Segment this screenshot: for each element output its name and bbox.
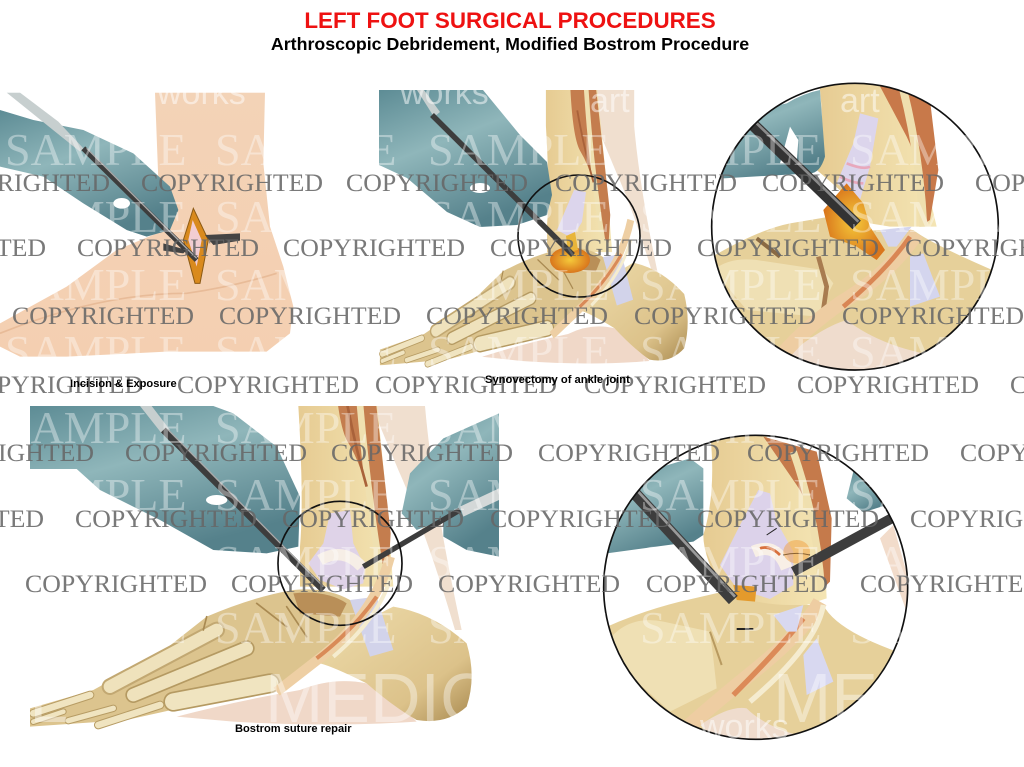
orange tissue (733, 585, 757, 602)
watermark: COPYRIGHTED rows (0, 168, 1024, 598)
watermark: COPYRIGHTED rows: COPYRIGHTED (426, 301, 608, 330)
watermark: SAMPLE rows: SAMPLE (215, 536, 396, 587)
watermark: COPYRIGHTED rows: COPYRIGHTED (25, 569, 207, 598)
left instrument (633, 492, 733, 600)
right instrument (363, 510, 460, 567)
subtitle: Arthroscopic Debridement, Modified Bostrom Procedure (271, 34, 749, 54)
panel: synovectomy of ankle joint (379, 87, 688, 365)
watermark: SAMPLE rows: SAMPLE (215, 469, 396, 520)
watermark: COPYRIGHTED rows: COPYRIGHTED (842, 301, 1024, 330)
caption: Bostrom: Bostrom suture repair (235, 723, 352, 735)
sole tissue (700, 708, 793, 738)
watermark: COPYRIGHTED rows: COPYRIGHTED (125, 438, 307, 467)
title: LEFT FOOT SURGICAL PROCEDURES (304, 8, 716, 33)
foot bones (715, 218, 991, 353)
magnifier circle: panel 2 (518, 175, 640, 297)
watermark: SAMPLE rows: SAMPLE (640, 326, 821, 377)
watermark: SAMPLE rows: SAMPLE (428, 124, 609, 175)
watermark: COPYRIGHTED rows: COPYRIGHTED (331, 438, 513, 467)
watermark: SAMPLE rows: SAMPLE (5, 402, 186, 453)
watermark: artworks: art (590, 82, 630, 120)
muscle (763, 437, 832, 592)
watermark: SAMPLE rows: SAMPLE (215, 402, 396, 453)
watermark: SAMPLE rows: SAMPLE (5, 259, 186, 310)
watermark: COPYRIGHTED rows: COPYRIGHTED (490, 504, 672, 533)
watermark: SAMPLE rows: SAMPLE (640, 602, 821, 653)
watermark: SAMPLE rows: SAMPLE (5, 602, 186, 653)
watermark: COPYRIGHTED rows: COPYRIGHTED (555, 168, 737, 197)
watermark: COPYRIGHTED rows: COPYRIGHTED (646, 569, 828, 598)
ligaments (803, 638, 833, 695)
watermark: COPYRIGHTED rows: COPYRIGHTED (697, 504, 879, 533)
leg anatomy (546, 87, 660, 282)
ligament (557, 190, 586, 238)
tibia (817, 77, 937, 227)
watermark: SAMPLE rows: SAMPLE (5, 326, 186, 377)
foot skeleton (380, 220, 688, 365)
watermark: COPYRIGHTED rows: COPYRIGHTED (634, 301, 816, 330)
instrument (7, 93, 83, 152)
watermark: COPYRIGHTED rows: COPYRIGHTED (219, 301, 401, 330)
left instrument (140, 406, 170, 433)
foot bones (610, 592, 893, 734)
right glove hand (402, 413, 499, 557)
leg anatomy (298, 406, 462, 630)
ligaments (910, 253, 940, 307)
ankle lavender repair (308, 510, 365, 589)
watermark: artworks: works (156, 74, 246, 112)
watermark: SAMPLE rows: SAMPLE (428, 402, 609, 453)
watermark: COPYRIGHTED rows: COPYRIGHTED (12, 301, 194, 330)
watermark: COPYRIGHTED rows: COPYRIGHTED (177, 370, 359, 399)
watermark: SAMPLE rows: SAMPLE (640, 469, 821, 520)
watermark: COPYRIGHTED rows: COPYRIGHTED (75, 504, 257, 533)
watermark: COPYRIGHTED rows: COPYRIGHTED (797, 370, 979, 399)
watermark: COPYRIGHTED rows: COPYRIGHTED (538, 438, 720, 467)
peroneal tendon (783, 233, 917, 353)
watermark: COPYRIGHTED rows: COPYRIGHTED (231, 569, 413, 598)
watermark: SAMPLE rows: SAMPLE (640, 259, 821, 310)
panel: synovectomy close-up circle (707, 77, 1000, 380)
circle outline (712, 83, 998, 370)
instrument (417, 90, 440, 117)
watermark: COPYRIGHTED rows: COPYRIGHTED (375, 370, 557, 399)
inflamed tissue (823, 183, 885, 260)
foot skeleton (30, 557, 472, 727)
caption: synovectomy: Synovectomy of ankle joint (485, 374, 630, 386)
watermark: SAMPLE rows: SAMPLE (5, 469, 186, 520)
watermark: SAMPLE rows: SAMPLE (640, 536, 821, 587)
glove hand (379, 90, 552, 227)
watermark: COPYRIGHTED rows: COPYRIGHTED (584, 370, 766, 399)
skin strip (880, 525, 907, 608)
watermark: MEDICAL: MEDICAL (265, 659, 576, 737)
glove hand (722, 90, 825, 178)
watermark: artworks: works (699, 708, 789, 746)
watermark: SAMPLE rows: SAMPLE (428, 469, 609, 520)
left glove hand (603, 458, 703, 553)
watermark: artworks: works (399, 74, 489, 112)
watermark: COPYRIGHTED rows: COPYRIGHTED (490, 233, 672, 262)
watermark: COPYRIGHTED rows: COPYRIGHTED (77, 233, 259, 262)
panel: Bostrom suture repair (30, 406, 499, 730)
watermark: SAMPLE rows: SAMPLE (215, 259, 396, 310)
inflamed tissue (550, 247, 590, 273)
watermark: COPYRIGHTED rows: COPYRIGHTED (141, 168, 323, 197)
watermark: COPYRIGHTED rows: COPYRIGHTED (282, 504, 464, 533)
incision (183, 208, 208, 283)
watermark: SAMPLE rows: SAMPLE (428, 259, 609, 310)
panel: incision and exposure (0, 93, 293, 357)
watermark: SAMPLE rows: SAMPLE (428, 536, 609, 587)
watermark: COPYRIGHTED rows: COPYRIGHTED (762, 168, 944, 197)
watermark: SAMPLE rows: SAMPLE (428, 602, 609, 653)
caption: incision: Incision & Exposure (70, 378, 177, 390)
left glove hand (30, 406, 300, 553)
watermark: SAMPLE rows: SAMPLE (640, 191, 821, 242)
watermark: COPYRIGHTED rows: COPYRIGHTED (747, 438, 929, 467)
watermark: COPYRIGHTED rows: COPYRIGHTED (283, 233, 465, 262)
tibia (703, 432, 827, 612)
watermark: SAMPLE rows: SAMPLE (428, 326, 609, 377)
retractor (205, 233, 240, 245)
watermark: artworks: art (840, 82, 880, 120)
circle outline (604, 435, 908, 739)
watermark: SAMPLE rows: SAMPLE (215, 602, 396, 653)
watermark: SAMPLE rows: SAMPLE (215, 124, 396, 175)
watermark: SAMPLE rows: SAMPLE (215, 326, 396, 377)
watermark: SAMPLE rows: SAMPLE (5, 124, 186, 175)
leg and foot skin (0, 93, 293, 357)
watermark: SAMPLE rows: SAMPLE (5, 191, 186, 242)
watermark: SAMPLE rows: SAMPLE (428, 191, 609, 242)
watermark: SAMPLE rows: SAMPLE (215, 191, 396, 242)
glove hand (0, 110, 178, 237)
watermark: SAMPLE rows: SAMPLE (640, 402, 821, 453)
watermark: SAMPLE rows: SAMPLE (5, 536, 186, 587)
watermark: SAMPLE rows (5, 124, 1024, 653)
right instrument (793, 518, 892, 572)
muscle (880, 86, 938, 222)
watermark: COPYRIGHTED rows: COPYRIGHTED (438, 569, 620, 598)
watermark: COPYRIGHTED rows: COPYRIGHTED (346, 168, 528, 197)
watermark: COPYRIGHTED rows: COPYRIGHTED (697, 233, 879, 262)
sole tissue (792, 320, 921, 370)
right glove hand (847, 472, 887, 512)
magnifier circle: panel 4 (278, 501, 402, 625)
lavender repair (720, 490, 793, 599)
instrument (753, 125, 857, 225)
panel: suture repair close-up circle (603, 432, 910, 745)
peroneal tendon (690, 602, 820, 725)
watermark: SAMPLE rows: SAMPLE (640, 124, 821, 175)
watermark: artworks (156, 74, 880, 746)
watermark: MEDICAL (0, 659, 1024, 737)
